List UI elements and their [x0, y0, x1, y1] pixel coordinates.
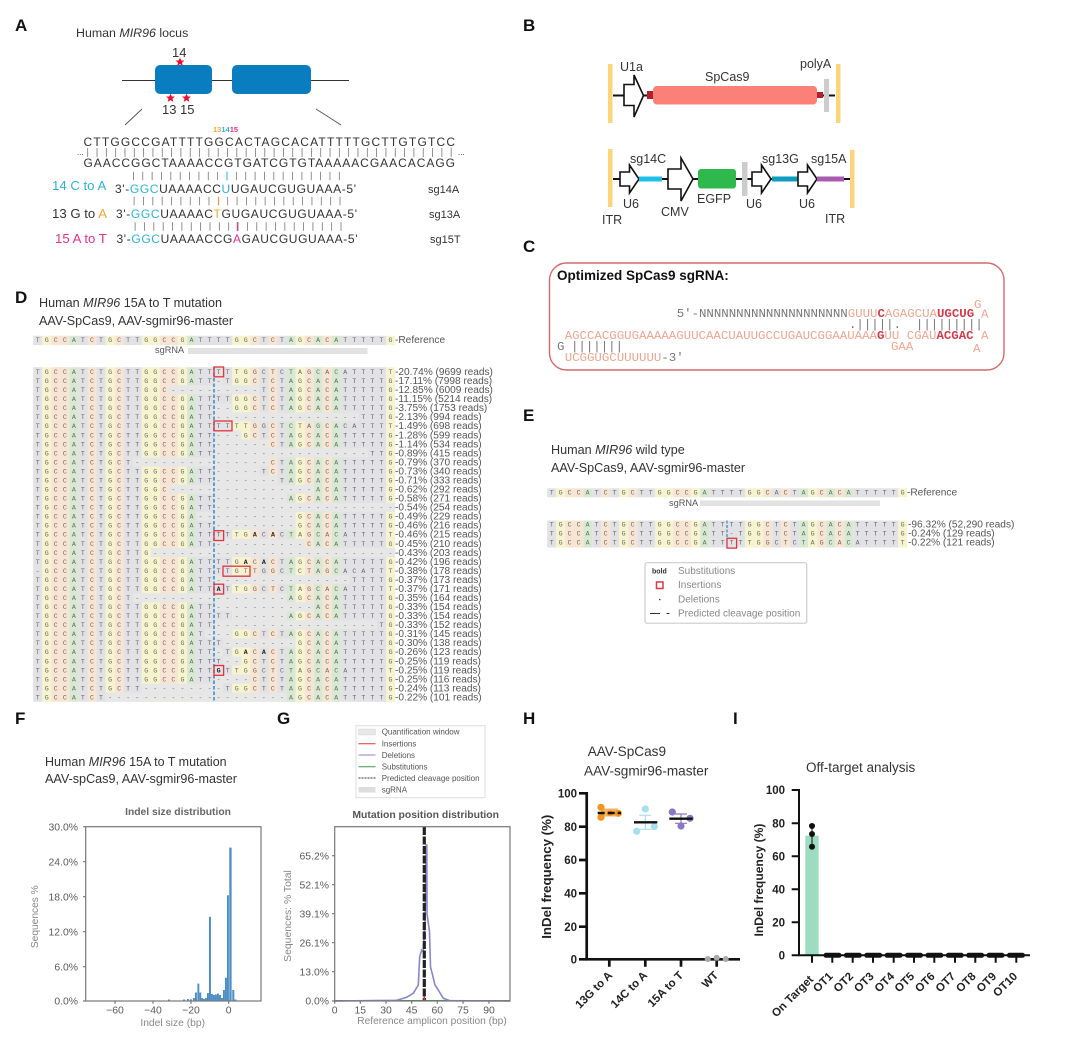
read frequency labels: -0.30% (138 reads): [395, 638, 482, 649]
reference sequence row: [33, 335, 445, 346]
panel letter B: B: [523, 16, 535, 35]
read frequency labels: -0.35% (164 reads): [395, 593, 482, 604]
allele sequence rows: TGCCATCTGCTTGGC----------TCTAGCACATTTTTG: [36, 387, 398, 394]
sgRNA track: [155, 345, 368, 355]
allele sequence rows: TGCCATCTGCTTGGCCGATTT--GCTCTAGCACATTTTTG: [36, 658, 398, 665]
axes: [579, 792, 740, 967]
panel F title: Human MIR96 15A to T mutation: [45, 755, 227, 769]
panel A: MIR96 locus and sgRNA design: [15, 16, 465, 246]
x tick labels: −20: [182, 1006, 200, 1016]
chart legend: Insertions: [382, 740, 416, 748]
sgRNA sequence structure: G: [557, 340, 564, 354]
predicted cleavage line: [213, 367, 215, 702]
allele sequence rows: TGCCATCTGCTTGGC----------------ACATTTTTG: [36, 487, 398, 494]
wild type allele rows: TGCCATCTGCTTGGCCGATT-TGGCTCTAGCACATTTTTG: [550, 531, 910, 538]
y tick labels: 0.0%: [305, 996, 329, 1008]
guide sg15T: [55, 222, 461, 246]
read frequency labels: -0.46% (216 reads): [395, 521, 482, 532]
allele sequence rows: TGCCATCTGCTTGGCCGATT--GGCTCTAGCACATTTTTG: [36, 405, 398, 412]
allele sequence rows: TGCCATCTGCTTGGCCGATT------CTAGCACATTTTTG: [36, 441, 398, 448]
chart legend: Quantification window: [382, 728, 460, 737]
read frequency labels: -0.22% (101 reads): [395, 692, 482, 703]
read frequency labels: -0.38% (178 reads): [395, 566, 482, 577]
y tick labels: [558, 788, 577, 966]
AAV-sgmir96-master construct: sg13G: [762, 152, 799, 166]
target DNA duplex: ...: [77, 148, 84, 157]
wild type allele rows: -0.22% (121 reads): [908, 538, 995, 549]
read frequency labels: -0.71% (333 reads): [395, 476, 482, 486]
panel D title: Human MIR96 15A to T mutation: [39, 296, 222, 310]
chart title: Mutation position distribution: [352, 810, 499, 821]
read frequency labels: -0.25% (119 reads): [395, 665, 481, 676]
x tick labels: [574, 970, 721, 1011]
sgRNA track: sgRNA: [155, 345, 185, 355]
panel letter H: H: [523, 709, 535, 728]
allele sequence rows: TGCCATCTGCTTGGCCGA-----------GCACATTTTTG: [36, 514, 398, 521]
sgRNA sequence structure: A: [981, 329, 989, 343]
read frequency labels: -0.62% (292 reads): [395, 484, 482, 496]
read frequency labels: -0.49% (229 reads): [395, 512, 482, 523]
AAV-sgmir96-master construct: CMV: [661, 205, 689, 219]
guide sg14A: sg14A: [428, 184, 460, 196]
panel letter D: D: [15, 288, 27, 307]
guide sg15T: 3'-GGCUAAAACCGAGAUCGUGUAAA-5': [116, 232, 358, 246]
allele coloured background: [33, 367, 395, 702]
y tick labels: 100: [558, 788, 577, 800]
read frequency labels: -0.45% (210 reads): [395, 539, 482, 550]
guide sg14A: [52, 172, 460, 196]
sgRNA sequence structure: A: [981, 308, 989, 322]
y tick labels: 6.0%: [54, 962, 78, 974]
allele sequence rows: TGCCATCT--------------------AGCACATTTTTG: [36, 694, 398, 701]
allele sequence rows: TGCCATCTGCTTGGCCGATTGTTGGCTCTAGCACATTTTT: [36, 667, 398, 674]
x tick labels: OT9: [975, 971, 999, 995]
chart axes: [332, 827, 510, 1004]
read frequency labels: -0.79% (370 reads): [395, 457, 482, 468]
x axis title: Reference amplicon position (bp): [357, 1016, 507, 1027]
x tick labels: 13G to A: [574, 970, 615, 1011]
AAV-sgmir96-master construct: [602, 149, 854, 227]
read frequency labels: -0.25% (116 reads): [395, 674, 481, 685]
panel I: off-target analysis: [733, 709, 1030, 1020]
y tick labels: 18.0%: [49, 892, 78, 904]
AAV-SpCas9 construct: [608, 57, 840, 123]
y axis title: Sequences %: [30, 885, 41, 948]
chart legend: Deletions: [382, 751, 415, 760]
y tick labels: 0: [571, 954, 577, 966]
x tick labels: [770, 970, 1020, 1020]
guide sg15T: sg15T: [430, 234, 461, 246]
read frequency labels: -3.75% (1753 reads): [395, 403, 487, 414]
x tick labels: On Target: [770, 974, 816, 1020]
read frequency labels: -0.26% (123 reads): [395, 647, 482, 658]
guide sg13A: 13 G to A: [52, 206, 107, 221]
sgRNA sequence structure: AGCCACGGUGAAAAAGUUCAACUAUUGCCUGAUCGGAAUAAAGUU: [565, 329, 899, 343]
allele sequence rows: TGCCATCTGCT---------------CTAGCACATTTTTG: [36, 459, 398, 466]
read frequency labels: -1.14% (534 reads): [395, 439, 482, 450]
read frequency labels: -11.15% (5214 reads): [395, 394, 492, 405]
AAV-SpCas9 construct: SpCas9: [705, 70, 750, 84]
guide sg15T: 15 A to T: [55, 231, 107, 246]
y tick labels: 40: [772, 884, 785, 896]
chart title: Indel size distribution: [125, 807, 231, 818]
alignment legend: Predicted cleavage position: [678, 609, 800, 620]
x tick labels: 30: [380, 1006, 392, 1016]
alignment legend: bold: [652, 568, 667, 576]
y tick labels: 100: [766, 785, 785, 797]
y tick labels: 12.0%: [49, 928, 78, 938]
y tick labels: 39.1%: [300, 910, 329, 920]
panel letter G: G: [277, 709, 290, 728]
wild type allele rows: -96.32% (52,290 reads): [908, 520, 1014, 531]
allele sequence rows: [36, 369, 398, 701]
reference sequence row: -Reference: [395, 335, 445, 346]
panel letter I: I: [733, 709, 738, 728]
x tick labels: −40: [144, 1006, 162, 1016]
y axis title: Sequences: % Total: [283, 870, 294, 962]
y tick labels: 80: [772, 818, 785, 830]
AAV-sgmir96-master construct: U6: [799, 197, 815, 211]
chart legend: sgRNA: [382, 786, 408, 794]
x tick labels: OT1: [811, 970, 836, 995]
allele sequence rows: TGCCATCTGCTTGGCCGATT-----------------TTG: [36, 450, 398, 457]
allele sequence rows: TGCCATCTGCTTGGCCGATTTTTGACACTAGCACATTTTT: [36, 532, 398, 539]
y tick labels: [49, 822, 78, 1008]
panel H title line 1: AAV-SpCas9: [588, 744, 666, 759]
panel F subtitle: AAV-spCas9, AAV-sgmir96-master: [45, 772, 237, 786]
on target points: [809, 823, 815, 850]
panel letter F: F: [15, 709, 25, 728]
alignment legend: Substitutions: [678, 566, 735, 577]
allele sequence rows: TGCCATCTGCTTG---------------------------: [36, 550, 398, 557]
panel E: allele alignment, wild type: [523, 406, 1014, 623]
y tick labels: 26.1%: [300, 938, 329, 950]
allele sequence rows: TGCCATCTGCTTGGCCGATT------------------TG: [36, 622, 398, 629]
allele sequence rows: TGCCATCTGCTTGGCCGATTTTTTGGCTCTAGCACATTTT: [36, 423, 398, 430]
panel D: allele alignment, MIR96 15A to T: [15, 288, 493, 703]
panel I title: Off-target analysis: [806, 760, 916, 775]
x tick labels: 15A to T: [646, 970, 686, 1010]
AAV-sgmir96-master construct: sg15A: [811, 152, 847, 166]
allele sequence rows: TGCCATCTGCTTGGCCGATT----CTCTAGCACATTTTTG: [36, 676, 398, 683]
x tick labels: OT2: [832, 971, 856, 995]
position traces: [335, 827, 510, 1001]
x tick labels: 45: [406, 1006, 418, 1016]
read frequency labels: -0.46% (215 reads): [395, 530, 482, 541]
sgRNA sequence structure: G: [974, 298, 981, 312]
reference row: -Reference: [907, 488, 957, 499]
allele sequence rows: TGCCATCTGCTTGGCCGATT-------TAGCACATTTTTG: [36, 477, 398, 484]
group WT points: [705, 955, 729, 962]
guide sg14A: 3'-GGCUAAAACCUUGAUCGUGUAAA-5': [115, 182, 356, 196]
axes: [792, 789, 1030, 963]
y tick labels: 80: [564, 822, 577, 834]
panel B: AAV vector constructs: [523, 16, 854, 227]
read frequency labels: [395, 367, 493, 703]
panel F: indel size distribution: [15, 709, 261, 1029]
allele sequence rows: -GCCATCTGCTTGGCCGATTTTGTTGGCTCTAGCACATTT: [36, 568, 398, 575]
group 13G to A points: [597, 804, 622, 821]
y tick labels: 65.2%: [300, 852, 329, 862]
AAV-sgmir96-master construct: ITR: [825, 212, 845, 226]
group 15A to T points: [669, 808, 694, 830]
x tick labels: −60: [106, 1006, 124, 1016]
position numbers 13 14 15: 131415: [213, 125, 238, 134]
x tick labels: OT8: [954, 970, 979, 995]
panel H title line 2: AAV-sgmir96-master: [584, 764, 709, 779]
AAV-sgmir96-master construct: EGFP: [697, 192, 731, 206]
x tick labels: 60: [432, 1006, 443, 1016]
panel C: optimized sgRNA: [523, 237, 1004, 370]
allele sequence rows: TGCCATCTGCTTGGCCGATT-TGGCTCTAGCACATTTTTG: [36, 378, 398, 385]
read frequency labels: -1.28% (599 reads): [395, 430, 482, 441]
read frequency labels: -20.74% (9699 reads): [395, 367, 493, 378]
sgRNA track: sgRNA: [669, 498, 699, 508]
AAV-sgmir96-master construct: sg14C: [630, 152, 666, 166]
sgRNA sequence structure: .|||||. |||||||||: [849, 318, 983, 332]
chart legend: [356, 726, 485, 798]
y tick labels: 40: [564, 888, 577, 900]
AAV-SpCas9 construct: U1a: [620, 60, 643, 74]
panel D subtitle: AAV-SpCas9, AAV-sgmir96-master: [39, 314, 233, 328]
sgRNA sequence structure: UCGGUGCUUUUUU-3′: [565, 351, 684, 365]
allele sequence rows: TGCCATCTGCTTGGCCGATTATTGGCTCTAGCACATTTTT: [36, 586, 398, 593]
sgRNA sequence structure: A: [973, 342, 981, 356]
allele sequence rows: TGCCATCTGCTTGGCCGATT-TGACACTAGCACATTTTTG: [36, 649, 398, 656]
sgRNA sequence structure: |||||||: [571, 340, 623, 354]
reference sequence row: TGCCATCTGCTTGGCCGATTTTGGCTCTAGCACATTTTTG: [36, 337, 398, 344]
x tick labels: 90: [483, 1006, 495, 1016]
off target points: [826, 953, 1023, 958]
x tick labels: OT6: [913, 971, 938, 995]
allele sequence rows: TGCCATCTGCTTGGCCGATTTTGACACTAGCACATTTTTG: [36, 559, 398, 566]
read frequency labels: -0.25% (119 reads): [395, 656, 481, 667]
group 14C to A points: [633, 805, 658, 835]
read frequency labels: -0.73% (340 reads): [395, 466, 482, 477]
x tick labels: 15: [355, 1006, 366, 1016]
x tick labels: 0: [226, 1006, 232, 1016]
read frequency labels: -0.31% (145 reads): [395, 629, 482, 640]
panel letter C: C: [523, 237, 535, 256]
read frequency labels: -2.13% (994 reads): [395, 412, 482, 423]
indel bars: [168, 848, 236, 1001]
guide sg13A: [52, 197, 461, 221]
insertion boxes: [214, 367, 250, 675]
guide sg13A: sg13A: [429, 209, 461, 221]
gene locus diagram: [122, 45, 349, 125]
allele sequence rows: TGCCATCTGCTTGGCCGATT--------AGCACATTTTTG: [36, 496, 398, 503]
chart legend: Predicted cleavage position: [382, 774, 480, 783]
allele sequence rows: TGCCATCTGCTTGGCCGATT----------CACATTTTTG: [36, 541, 398, 548]
allele sequence rows: TGCCATCTGCTTGGCCGAT---GGCTCTAGCACATTTTTG: [36, 631, 398, 638]
allele sequence rows: TGCCATCTGCTTGGCCGATT----------------TTTG: [36, 414, 398, 421]
x tick labels: OT3: [852, 971, 877, 995]
allele sequence rows: TGCCATCTGCTTGGCCGATTTTTGGCTCTAGCACATTTTT: [36, 369, 398, 376]
x tick labels: 14C to A: [609, 970, 650, 1011]
AAV-SpCas9 construct: polyA: [800, 57, 832, 71]
read frequency labels: -12.85% (6009 reads): [395, 385, 493, 396]
allele sequence rows: TGCCATCTGCTTGGCCGATT---------GCACATTTTTG: [36, 523, 398, 530]
x axis title: Indel size (bp): [140, 1018, 205, 1029]
y tick labels: 13.0%: [300, 968, 329, 978]
reference row: [547, 488, 957, 499]
y axis title: InDel frequency (%): [539, 815, 554, 939]
y tick labels: 0: [779, 950, 785, 962]
y tick labels: 24.0%: [49, 858, 78, 868]
AAV-sgmir96-master construct: U6: [746, 197, 762, 211]
target DNA duplex: [77, 135, 465, 170]
y tick labels: 0.0%: [54, 996, 78, 1008]
alignment legend: Deletions: [678, 594, 720, 606]
gene locus diagram: 13: [162, 102, 176, 117]
allele sequence rows: TGCCATCTGCTTGGCCGATT-----TCTAGCACATTTTTG: [36, 468, 398, 475]
y axis title: InDel frequency (%): [752, 824, 766, 936]
sgRNA sequence structure: 5′-NNNNNNNNNNNNNNNNNNNNGUUUCAGAGCUAUGCUG: [677, 307, 974, 321]
x tick labels: OT5: [893, 970, 918, 995]
sgRNA sequence structure: CGAUACGAC: [907, 329, 974, 343]
sgRNA track: [669, 498, 880, 508]
sgRNA heading: Optimized SpCas9 sgRNA:: [557, 268, 729, 283]
rounded callout box: [550, 263, 1004, 370]
x tick labels: WT: [700, 970, 721, 991]
target DNA duplex: ...: [458, 148, 465, 157]
on target bar: [805, 836, 819, 955]
locus title: Human MIR96 locus: [76, 26, 188, 40]
target DNA duplex: GAACCGGCTAAAACCGTGATCGTGTAAAAACGAACACAGG: [84, 156, 455, 170]
alignment legend: [645, 563, 807, 623]
x tick labels: 0: [332, 1006, 338, 1016]
sgRNA sequence structure: GAA: [891, 340, 914, 354]
alignment legend: Insertions: [678, 580, 721, 591]
x tick labels: [106, 1006, 232, 1016]
panel E title: Human MIR96 wild type: [551, 443, 685, 457]
allele sequence rows: TGCCATCTGCTTGGCCGATT--------------------: [36, 505, 398, 512]
x tick labels: OT10: [991, 971, 1020, 999]
target DNA duplex: CTTGGCCGATTTTGGCACTAGCACATTTTTGCTTGTGTCC: [84, 135, 455, 149]
wild type allele rows: [547, 520, 1014, 549]
y tick labels: 60: [564, 855, 577, 867]
x tick labels: 75: [457, 1006, 469, 1016]
allele sequence rows: TGCCATCTGCT-----------------AGCACATTTTTG: [36, 595, 398, 602]
allele sequence rows: TGCCATCTGCTTGGCCGATTT--------GCACATTTTTG: [36, 640, 398, 647]
panel letter A: A: [15, 16, 27, 35]
y tick labels: 60: [772, 851, 785, 863]
y tick labels: 20: [772, 917, 785, 929]
read frequency labels: -0.54% (254 reads): [395, 503, 482, 514]
gene locus diagram: 14: [172, 45, 186, 60]
allele sequence rows: TGCCATCTGCTTGGCCGATTTT------AGCACATTTTTG: [36, 613, 398, 620]
y tick labels: 30.0%: [49, 822, 78, 834]
read frequency labels: -0.33% (152 reads): [395, 620, 482, 631]
reference row: TGCCATCTGCTTGGCCGATTTTGGCACTAGCACATTTTTG: [550, 490, 910, 497]
guide sg13A: 3'-GGCUAAAACTGUGAUCGUGUAAA-5': [116, 207, 357, 221]
x tick labels: OT4: [873, 970, 898, 995]
x tick labels: [332, 1006, 495, 1016]
wild type allele rows: TGCCATCTGCTTGGCCGATTTTTGGCTCTAGCACATTTTT: [550, 540, 910, 547]
read frequency labels: -0.37% (171 reads): [395, 584, 482, 595]
wild type allele rows: -0.24% (129 reads): [908, 529, 995, 540]
read frequency labels: -0.33% (154 reads): [395, 611, 482, 622]
allele sequence rows: TGCCATCTGCTT---------TGGCTCTAGCACATTTTTG: [36, 685, 398, 692]
AAV-sgmir96-master construct: ITR: [602, 213, 622, 227]
AAV-sgmir96-master construct: U6: [623, 197, 639, 211]
read frequency labels: -0.37% (173 reads): [395, 575, 482, 586]
read frequency labels: -0.58% (271 reads): [395, 494, 482, 505]
y tick labels: [300, 852, 329, 1008]
y tick labels: 20: [564, 922, 577, 934]
read frequency labels: -17.11% (7998 reads): [395, 376, 492, 387]
gene locus diagram: 15: [180, 102, 194, 117]
wild type allele rows: TGCCATCTGCTTGGCCGATTTTGGCTCTAGCACATTTTTG: [550, 522, 910, 529]
read frequency labels: -0.42% (196 reads): [395, 557, 482, 568]
allele sequence rows: TGCCATCTGCTTGGCCGATT---------------TTTTG: [36, 577, 398, 584]
panel H: InDel frequency scatter: [523, 709, 740, 1011]
x tick labels: OT7: [934, 971, 958, 995]
chart axes: [83, 827, 261, 1004]
read frequency labels: -0.33% (154 reads): [395, 602, 482, 613]
panel letter E: E: [523, 406, 534, 425]
allele sequence rows: TGCCATCTGCTTGGCCGATT---GCTCTAGCACATTTTTG: [36, 432, 398, 439]
chart legend: Substitutions: [382, 762, 428, 772]
read frequency labels: -0.43% (203 reads): [395, 548, 482, 559]
read frequency labels: -1.49% (698 reads): [395, 421, 482, 432]
y tick labels: 52.1%: [300, 880, 329, 892]
guide sg14A: 14 C to A: [52, 178, 106, 193]
allele sequence rows: TGCCATCTGCTTGGCCGATTTTGGCTCTAGCACATTTTTG: [36, 396, 398, 403]
read frequency labels: -0.24% (113 reads): [395, 683, 481, 694]
sgRNA sequence structure: [557, 298, 989, 365]
panel E subtitle: AAV-SpCas9, AAV-sgmir96-master: [551, 461, 745, 475]
allele sequence rows: TGCCATCTGCTTGGCCGATT-----------ACATTTTTG: [36, 604, 398, 611]
panel G: mutation position distribution: [277, 709, 510, 1027]
y tick labels: [766, 785, 785, 962]
read frequency labels: -0.89% (415 reads): [395, 448, 482, 459]
